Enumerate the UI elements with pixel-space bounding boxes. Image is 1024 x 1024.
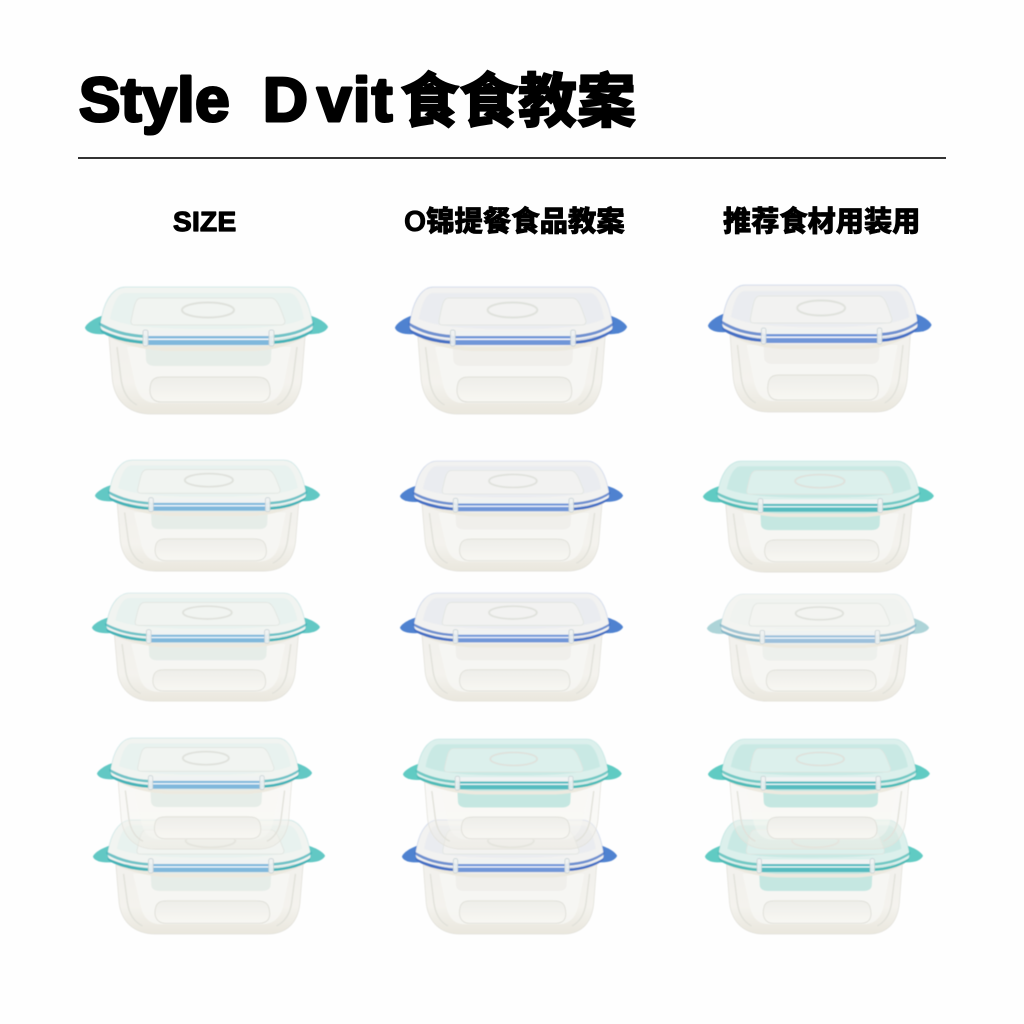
container: row 3 column 1 [92, 593, 320, 701]
title: D [263, 66, 308, 135]
title: Style [79, 66, 230, 135]
column heading: recommended ingredients: 推荐食材用装用 [723, 205, 920, 237]
container: row 2 column 3 [703, 461, 934, 572]
column heading: size: SIZE [173, 206, 236, 237]
divider line [78, 157, 946, 159]
stacked containers: column 1 [93, 738, 325, 934]
container grid [85, 285, 934, 934]
container: row 3 column 2 [400, 593, 623, 701]
container: row 1 column 1 [85, 287, 328, 414]
container: row 2 column 2 [400, 461, 623, 571]
title: 食食教案 [400, 69, 636, 135]
column heading: meal plan: O锦提餐食品教案 [404, 205, 625, 238]
container: row 3 column 3 [707, 594, 929, 701]
title: vit [317, 66, 394, 135]
container: row 2 column 1 [95, 460, 320, 571]
container: row 1 column 3 [708, 285, 932, 412]
stacked containers: column 2 [402, 739, 622, 934]
stacked containers: column 3 [705, 739, 930, 934]
title [79, 66, 636, 135]
container: row 1 column 2 [395, 287, 627, 414]
